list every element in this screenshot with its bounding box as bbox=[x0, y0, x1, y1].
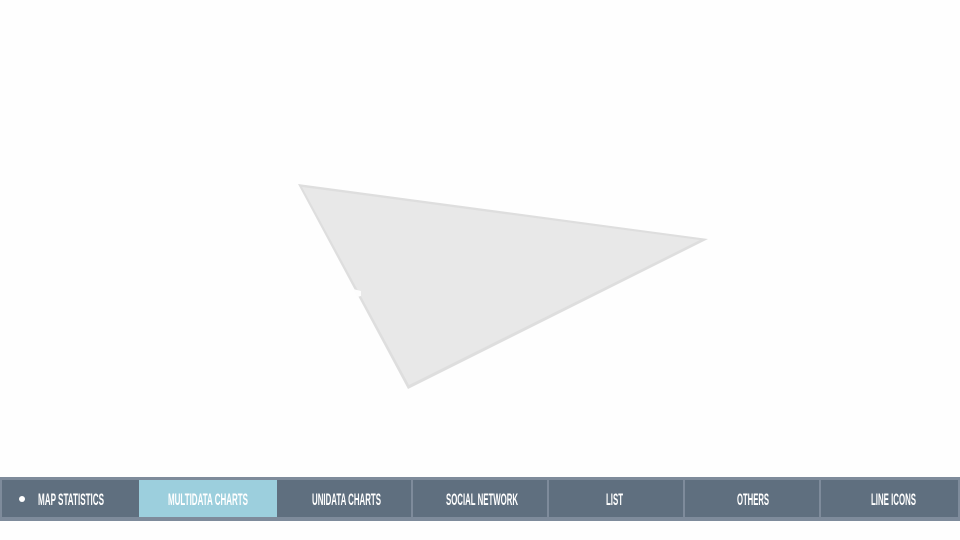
tab: map statistics bbox=[2, 480, 139, 517]
navigation bar bbox=[0, 477, 960, 521]
tab: map statistics: MAP STATISTICS bbox=[38, 490, 104, 509]
tab: others: OTHERS bbox=[737, 490, 769, 509]
tab: unidata charts bbox=[277, 480, 411, 517]
tab: list bbox=[549, 480, 683, 517]
bullet marker bbox=[19, 496, 25, 502]
triangle shape bbox=[298, 184, 708, 389]
tab: line icons bbox=[821, 480, 958, 517]
tab: social network bbox=[413, 480, 547, 517]
tab: list: LIST bbox=[606, 490, 623, 509]
tab: social network: SOCIAL NETWORK bbox=[446, 490, 518, 509]
tab: unidata charts: UNIDATA CHARTS bbox=[312, 490, 381, 509]
tab: multidata charts (active): MULTIDATA CHARTS bbox=[168, 490, 248, 509]
tab: multidata charts (active) bbox=[139, 480, 277, 517]
tab: others bbox=[685, 480, 819, 517]
